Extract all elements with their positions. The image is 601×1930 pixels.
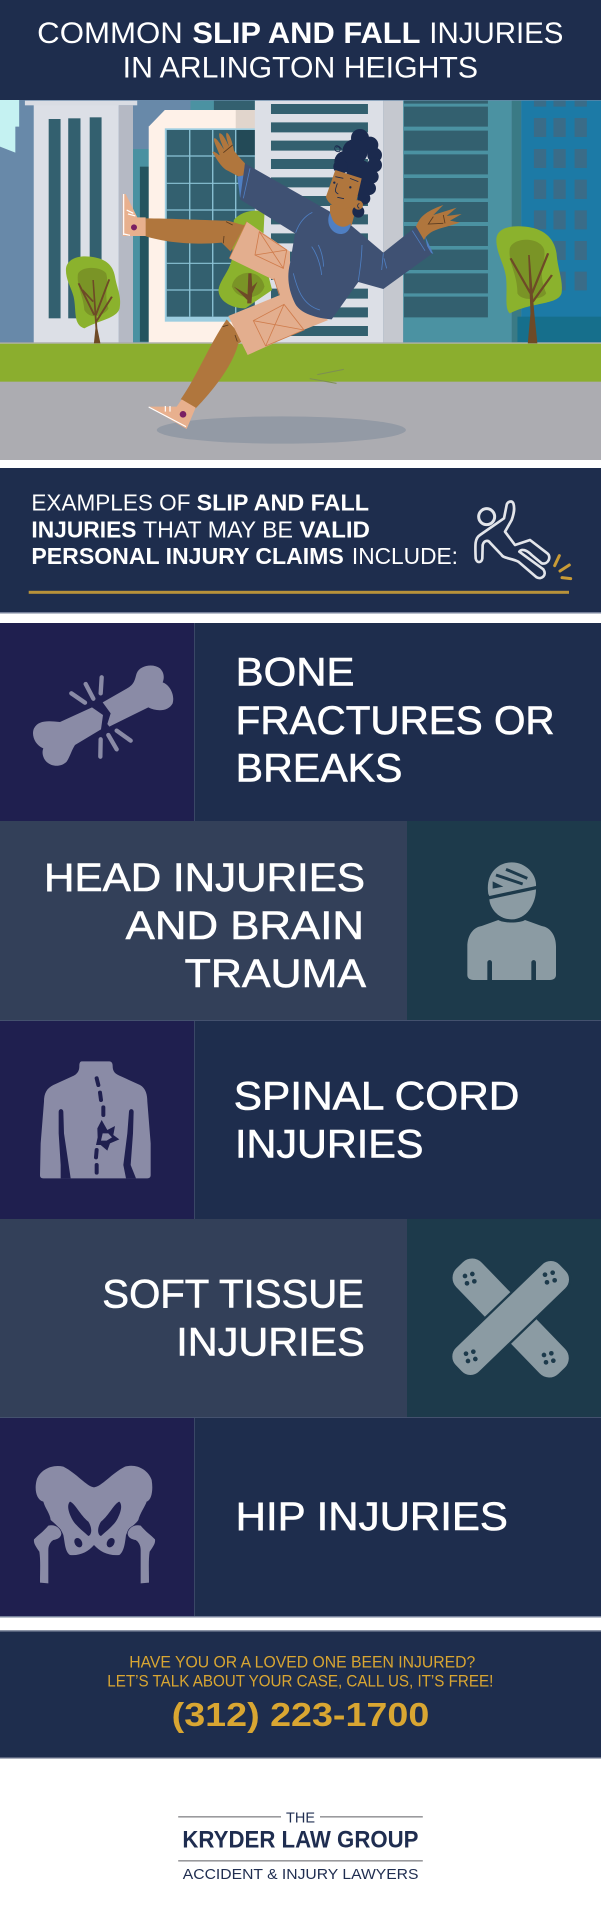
title: INJURIES	[429, 17, 563, 50]
intro text: INCLUDE:	[352, 543, 458, 569]
hand and knee details	[223, 145, 445, 243]
intro text: INJURIES	[31, 517, 136, 543]
left hand	[213, 133, 245, 179]
intro text: SLIP AND FALL	[197, 490, 369, 516]
icon: bandaged head	[467, 862, 556, 980]
title	[37, 17, 563, 85]
icon: right tree	[496, 226, 562, 343]
panel: head injuries	[0, 821, 601, 1020]
call to action text	[107, 1653, 493, 1690]
face	[326, 170, 363, 210]
heading: AND BRAIN	[126, 904, 364, 948]
logo: Kryder Law Group: KRYDER LAW GROUP	[182, 1826, 418, 1853]
sweater	[237, 163, 433, 319]
panel: title header	[0, 0, 601, 100]
panel: call to action	[0, 1630, 601, 1758]
heading	[102, 1273, 365, 1365]
call to action text: LET’S TALK ABOUT YOUR CASE, CALL US, IT’S FREE!	[107, 1672, 493, 1690]
icon: broken bone	[33, 666, 173, 766]
intro text	[31, 490, 458, 569]
logo: Kryder Law Group: THE	[286, 1811, 315, 1827]
left leg and raised shoe	[123, 194, 245, 252]
city background	[0, 100, 601, 343]
heading: HIP INJURIES	[236, 1495, 508, 1539]
title: SLIP AND FALL	[192, 17, 420, 50]
icon: pelvis	[34, 1466, 155, 1583]
panel: hero illustration	[0, 100, 601, 460]
heading	[236, 651, 555, 791]
icon: slipping person	[475, 502, 571, 579]
shorts	[228, 222, 328, 355]
panel: examples intro	[0, 468, 601, 614]
icon: left tree	[66, 256, 120, 343]
lower leg and shoe	[148, 319, 245, 429]
panel: hip injuries	[0, 1417, 601, 1618]
intro text: THAT MAY BE	[143, 517, 293, 543]
heading: INJURIES	[176, 1321, 365, 1365]
panel: bone fractures	[0, 623, 601, 821]
right hand	[416, 205, 462, 240]
title: COMMON	[37, 17, 183, 50]
call to action text: HAVE YOU OR A LOVED ONE BEEN INJURED?	[129, 1653, 475, 1671]
heading: SOFT TISSUE	[102, 1273, 364, 1317]
panel: spinal cord injuries	[0, 1020, 601, 1219]
icon: crossed bandages	[446, 1253, 576, 1383]
logo: Kryder Law Group: ACCIDENT & INJURY LAWYERS	[183, 1866, 418, 1883]
intro text: VALID	[299, 517, 370, 543]
phone number: (312) 223-1700	[172, 1696, 429, 1733]
panel: soft tissue injuries	[0, 1219, 601, 1417]
heading: BREAKS	[236, 747, 402, 791]
intro text: EXAMPLES OF	[31, 490, 191, 516]
logo: Kryder Law Group	[178, 1811, 423, 1883]
heading: SPINAL CORD	[234, 1074, 519, 1118]
illustration: falling person	[123, 129, 462, 429]
icon: torso with spine	[40, 1061, 151, 1178]
heading: BONE	[236, 651, 354, 695]
heading	[234, 1074, 519, 1166]
ground: grass and road	[0, 342, 601, 460]
icon: middle tree	[218, 211, 272, 308]
intro text: PERSONAL INJURY CLAIMS	[31, 543, 344, 569]
heading	[44, 856, 367, 996]
heading: HEAD INJURIES	[44, 856, 365, 900]
heading: FRACTURES OR	[236, 699, 555, 743]
neck and collar	[328, 200, 358, 234]
gold divider	[29, 591, 569, 594]
heading: TRAUMA	[185, 952, 367, 996]
heading: INJURIES	[235, 1122, 424, 1166]
title: IN ARLINGTON HEIGHTS	[123, 52, 478, 85]
hair	[333, 129, 382, 218]
